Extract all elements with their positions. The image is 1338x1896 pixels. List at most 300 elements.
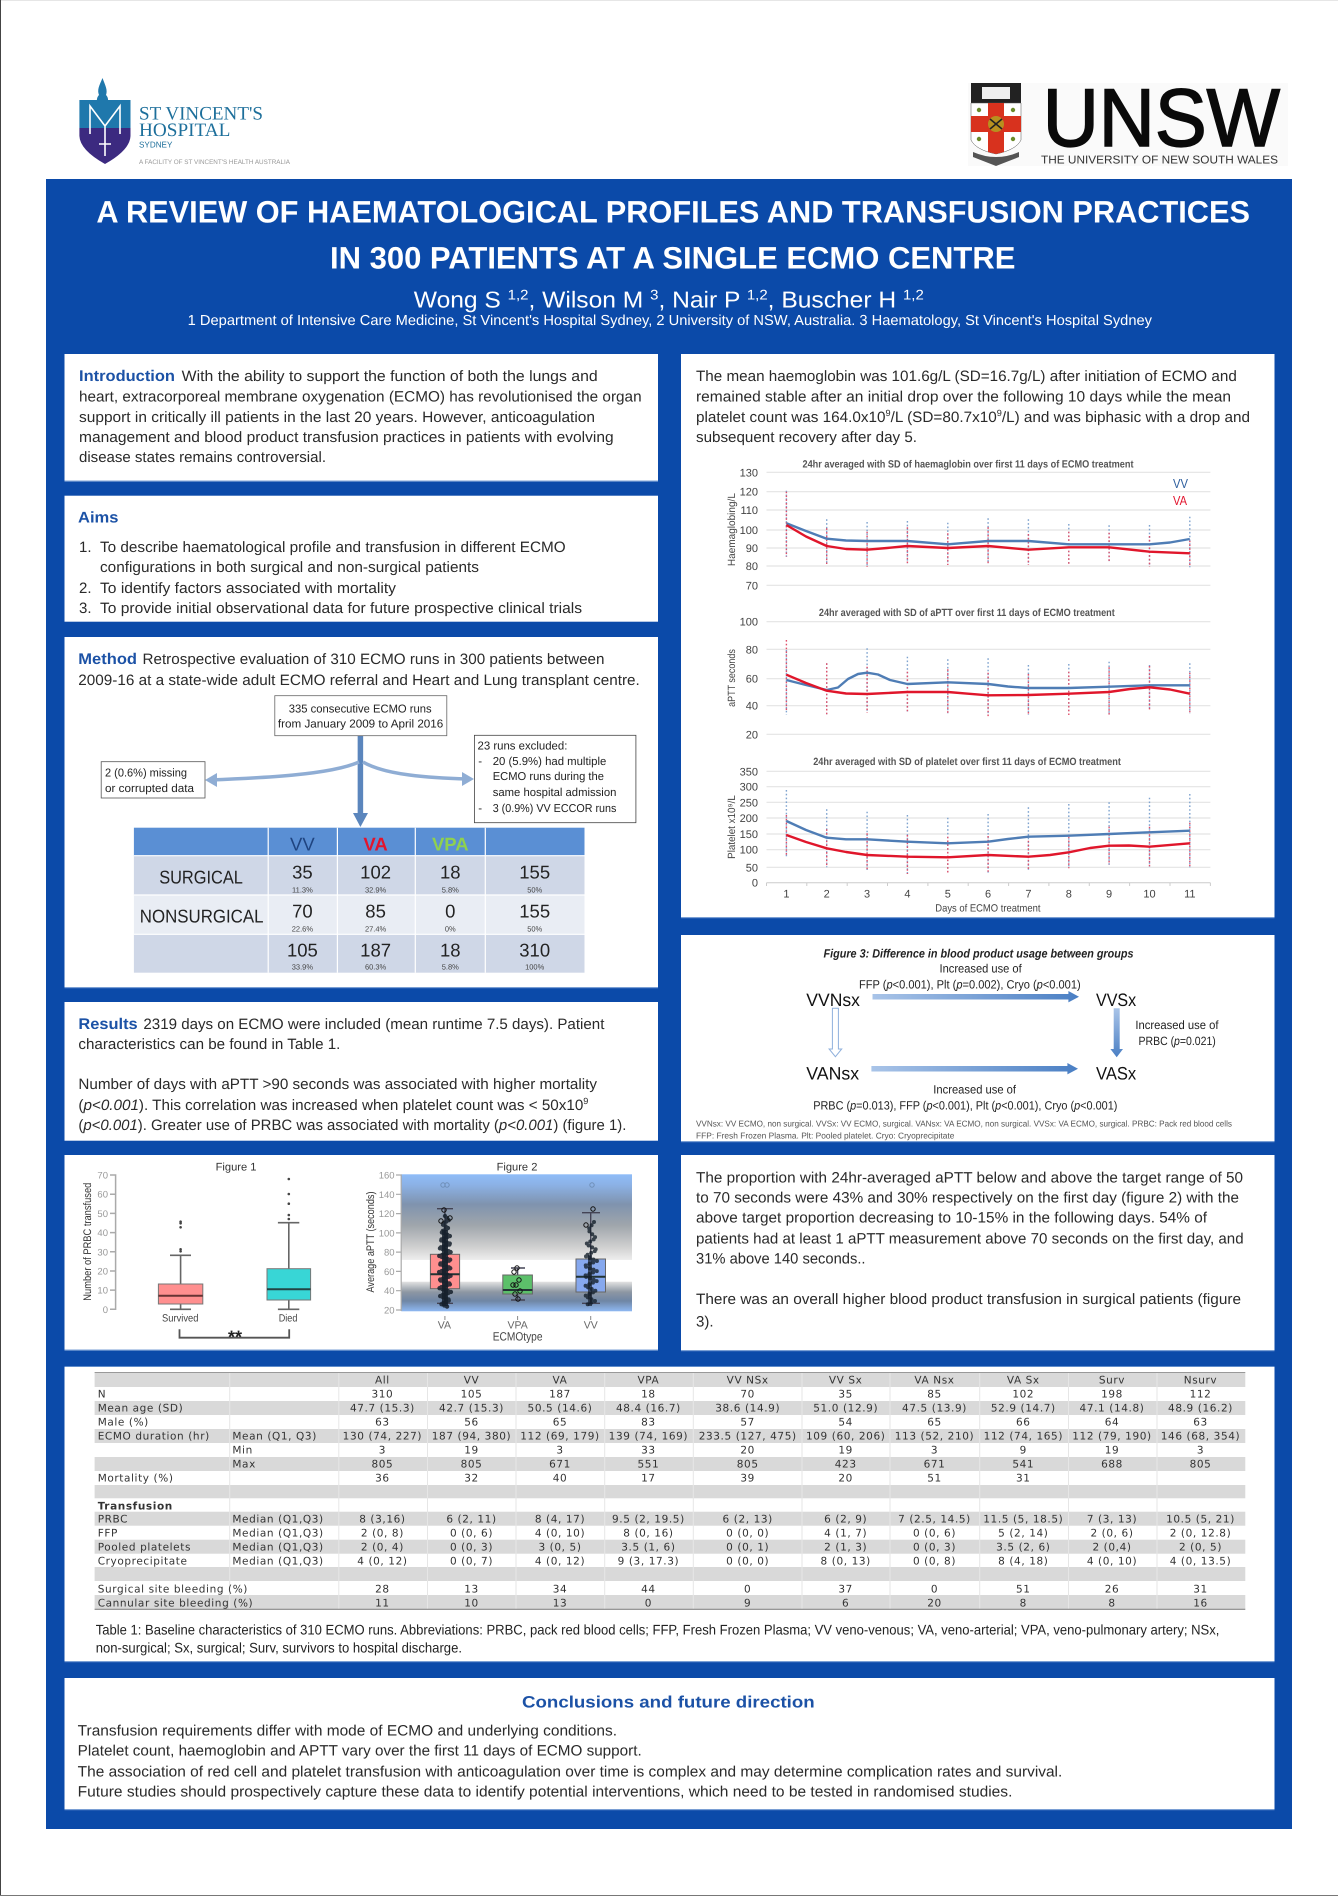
row: male: 65: [927, 1416, 942, 1428]
row: ECMO duration mean: 109 (60, 206): [806, 1430, 885, 1442]
table caption: non-surgical; Sx, surgical; Surv, survivors to hospital discharge.: [96, 1639, 462, 1655]
row: PRBC: [98, 1513, 1235, 1525]
ECMO runs summary table: 0%: [445, 924, 456, 933]
row: cannular site bleeding: 11: [375, 1597, 390, 1609]
row: cryoprecipitate: Cryoprecipitate: [98, 1555, 188, 1567]
row: PRBC: 7 (2.5, 14.5): [898, 1513, 971, 1525]
panel: introduction: support in critically ill patients in the last 20 years. However, anticoagulation: [79, 409, 595, 426]
panel: conclusions: Platelet count, haemoglobin and APTT vary over the first 11 days of ECMO support.: [78, 1743, 642, 1760]
row: mortality: Mortality (%): [98, 1472, 174, 1484]
logo: UNSW: THE UNIVERSITY OF NEW SOUTH WALES: [1041, 154, 1278, 166]
row: surgical site bleeding: 44: [641, 1583, 656, 1595]
flow box: missing data: 2 (0.6%) missing: [105, 768, 187, 780]
row: cannular site bleeding: 13: [553, 1597, 567, 1609]
row: ECMO duration mean: 112 (74, 165): [984, 1430, 1063, 1442]
panel: aPTT target text: There was an overall higher blood product transfusion in surgical patients (figure: [696, 1291, 1241, 1308]
line chart: platelet: 24hr averaged with SD of platelet over first 11 days of ECMO treatment: [813, 756, 1121, 768]
authors: , Nair P: [658, 286, 747, 312]
ECMO runs summary table: 102: [360, 861, 391, 882]
chart: figure 2 aPTT box plot: 20: [384, 1306, 395, 1316]
line chart: aPTT: 20: [746, 729, 758, 741]
row: ECMO duration max: 551: [637, 1458, 659, 1470]
ECMO runs summary table: 0: [445, 901, 455, 922]
arrow: VVNsx to VANsx (hollow): [829, 1008, 842, 1057]
row: FFP: 2 (0, 12.8): [1170, 1527, 1231, 1539]
panel: aims: 2.: [79, 580, 92, 597]
line chart: platelet: 350: [740, 766, 758, 778]
row: cannular site bleeding: 10: [464, 1597, 479, 1609]
row: surgical site bleeding: 13: [464, 1583, 479, 1595]
panel: aims: 3.: [79, 600, 92, 617]
chart: figure 2 aPTT box plot: VV: [584, 1319, 598, 1331]
panel: haemoglobin and platelet text with line charts: subsequent recovery after day 5.: [696, 429, 917, 446]
panel: introduction: [64, 354, 658, 482]
row: PRBC: 6 (2, 9): [824, 1513, 867, 1525]
row: surgical site bleeding: 34: [553, 1583, 567, 1595]
logo: St Vincent's Hospital: ST VINCENT'S: [139, 103, 263, 124]
panel: aPTT target text: The proportion with 24hr-averaged aPTT below and above the target range of 50: [696, 1169, 1243, 1186]
chart: figure 1 PRBC box plot: 50: [97, 1209, 108, 1220]
panel: figure 3 blood product usage: PRBC (p=0.021): [1138, 1034, 1216, 1048]
panel: introduction: Introduction: [79, 368, 175, 385]
chart: figure 2 aPTT box plot: [365, 1162, 632, 1344]
panel: results: 2319 days on ECMO were included (mean runtime 7.5 days). Patient: [143, 1016, 605, 1033]
panel: aims: To provide initial observational data for future prospective clinical trials: [100, 600, 582, 617]
row: mortality: 36: [375, 1472, 390, 1484]
panel: haemoglobin and platelet text with line charts: [681, 354, 1274, 918]
title: [96, 195, 1250, 276]
row: ECMO duration mean: 139 (74, 169): [609, 1430, 688, 1442]
arrow: VVNsx to VVSx: [872, 991, 1079, 1002]
flow box: excluded runs: 23 runs excluded:: [478, 740, 567, 752]
row: ECMO duration min: 3: [931, 1444, 938, 1456]
panel: haemoglobin and platelet text with line charts: The mean haemoglobin was 101.6g/L (SD=16.7g/L) after initiation of ECMO and: [696, 368, 1237, 385]
row: surgical site bleeding: Surgical site bleeding (%): [98, 1583, 248, 1595]
row: pooled platelets: 0 (0, 3): [450, 1541, 493, 1553]
row: male: 83: [641, 1416, 656, 1428]
panel: haemoglobin and platelet text with line charts: /L (SD=80.7x10: [891, 409, 997, 426]
row: pooled platelets: 2 (0,4): [1092, 1541, 1132, 1553]
row: PRBC: 9.5 (2, 19.5): [612, 1513, 685, 1525]
panel: method: Retrospective evaluation of 310 ECMO runs in 300 patients between: [142, 651, 604, 668]
line chart: aPTT: 80: [746, 644, 758, 656]
chart: figure 1 PRBC box plot: 30: [97, 1247, 108, 1258]
line chart: haemoglobin: 100: [740, 525, 758, 537]
row: male: 63: [375, 1416, 390, 1428]
line chart: platelet: 7: [1025, 889, 1031, 901]
panel: figure 3 blood product usage: Increased use of: [940, 961, 1022, 975]
row: N: 70: [740, 1388, 755, 1400]
panel: method: [64, 637, 658, 988]
row: PRBC: 11.5 (5, 18.5): [983, 1513, 1063, 1525]
row: ECMO duration min: 9: [1020, 1444, 1027, 1456]
row: cryoprecipitate: 0 (0, 0): [726, 1555, 769, 1567]
line chart: platelet: 300: [740, 782, 758, 794]
panel: aims: To describe haematological profile and transfusion in different ECMO: [100, 539, 566, 556]
authors: 1,2: [747, 286, 768, 302]
ECMO runs summary table: SURGICAL: [159, 866, 243, 887]
row: male: 64: [1105, 1416, 1119, 1428]
row: mortality: 32: [464, 1472, 479, 1484]
row: FFP: FFP: [98, 1527, 118, 1539]
row: ECMO duration min: 19: [1105, 1444, 1119, 1456]
ECMO runs summary table: 100%: [525, 962, 545, 971]
row: mean age: 47.1 (14.8): [1080, 1402, 1144, 1414]
chart: figure 2 aPTT box plot: 40: [384, 1286, 395, 1297]
logo: UNSW: UNSW: [1043, 73, 1281, 164]
row: cannular site bleeding: 6: [842, 1597, 849, 1609]
panel: conclusions: Future studies should prospectively capture these data to identify potential interventions, which need to be tested in randomised studies.: [78, 1784, 1012, 1801]
table header row: VA Nsx: [914, 1374, 955, 1386]
row: N: 35: [838, 1388, 853, 1400]
flow box: excluded runs: 3 (0.9%) VV ECCOR runs: [493, 803, 617, 815]
row: ECMO duration min: 20: [740, 1444, 755, 1456]
flow box: excluded runs: ECMO runs during the: [493, 771, 604, 783]
flow arrows: [205, 736, 474, 827]
row: pooled platelets: 3 (0, 5): [538, 1541, 582, 1553]
chart: figure 2 aPTT box plot: VA: [438, 1319, 451, 1331]
line chart: haemoglobin: VV: [1173, 476, 1188, 491]
row: ECMO duration max: 805: [1190, 1458, 1211, 1470]
row: FFP: 0 (0, 6): [913, 1527, 956, 1539]
ECMO runs summary table: 5.8%: [442, 962, 459, 971]
title: IN 300 PATIENTS AT A SINGLE ECMO CENTRE: [330, 241, 1015, 276]
chart: figure 2 aPTT box plot: 120: [379, 1209, 395, 1220]
row: N: 112: [1190, 1388, 1211, 1400]
line chart: haemoglobin: 80: [746, 561, 758, 573]
line chart: haemoglobin: 24hr averaged with SD of haemaglobin over first 11 days of ECMO treatment: [802, 458, 1134, 470]
ECMO runs summary table: 18: [440, 861, 461, 882]
row: cryoprecipitate: 4 (0, 13.5): [1170, 1555, 1231, 1567]
row: male: 56: [464, 1416, 479, 1428]
panel: conclusions: Conclusions and future direction: [522, 1693, 815, 1711]
table header row: VV: [464, 1374, 479, 1386]
flow box: 335 consecutive runs: 335 consecutive ECMO runs: [289, 703, 432, 715]
flow box: 335 consecutive runs: [275, 696, 447, 736]
row: male: 54: [838, 1416, 853, 1428]
row: PRBC: 6 (2, 13): [723, 1513, 773, 1525]
line chart: platelet: 0: [752, 878, 758, 890]
row: ECMO duration mean: 187 (94, 380): [432, 1430, 511, 1442]
line chart: platelet: 6: [985, 889, 991, 901]
arrow: VVSx to VASx: [1110, 1008, 1123, 1057]
row: FFP: 2 (0, 6): [1090, 1527, 1134, 1539]
row: ECMO duration min: 19: [464, 1444, 479, 1456]
chart: figure 2 aPTT box plot: 140: [379, 1190, 395, 1201]
panel: figure 3 blood product usage: FFP: Fresh Frozen Plasma. Plt: Pooled platelet. Cryo: Cryoprecipitate: [696, 1130, 955, 1140]
authors: 1,2: [508, 286, 529, 302]
row: PRBC: PRBC: [98, 1513, 128, 1525]
table caption: Table 1: Baseline characteristics of 310 ECMO runs. Abbreviations: PRBC, pack red blood cells; FFP, Fresh Frozen Plasma; VV veno-venous; VA, veno-arterial; VPA, veno-pulmonary artery; NSx,: [96, 1621, 1219, 1637]
flow box: missing data: [101, 762, 205, 798]
panel: figure 3 blood product usage: [681, 935, 1274, 1142]
row: cryoprecipitate: 0 (0, 8): [913, 1555, 956, 1567]
panel: figure 3 blood product usage: VASx: [1096, 1063, 1136, 1083]
row: ECMO duration mean: [98, 1430, 1240, 1442]
panel: results: 9: [583, 1096, 588, 1106]
row: ECMO duration max: 805: [461, 1458, 482, 1470]
row: surgical site bleeding: 26: [1105, 1583, 1119, 1595]
arrow: VANsx to VASx: [871, 1063, 1078, 1074]
row: ECMO duration max: Max: [232, 1458, 256, 1470]
ECMO runs summary table: 310: [519, 940, 550, 961]
row: cannular site bleeding: 8: [1108, 1597, 1116, 1609]
ECMO runs summary table: 11.3%: [292, 885, 313, 894]
chart: figure 2 aPTT box plot: 60: [384, 1267, 395, 1278]
row: ECMO duration max: 541: [1012, 1458, 1034, 1470]
panel: figure 3 blood product usage: Figure 3: Difference in blood product usage between groups: [824, 946, 1134, 960]
panel: haemoglobin and platelet text with line charts: 9: [997, 408, 1002, 418]
row: cryoprecipitate: 4 (0, 12): [357, 1555, 408, 1567]
row: cryoprecipitate: 4 (0, 12): [535, 1555, 585, 1567]
line chart: platelet: 100: [740, 845, 758, 857]
chart: figure 1 PRBC box plot: **: [228, 1327, 242, 1347]
ECMO runs summary table: NONSURGICAL: [140, 905, 264, 926]
logo: St Vincent's Hospital: SYDNEY: [139, 139, 173, 149]
chart: figure 2 aPTT box plot: VPA: [507, 1319, 528, 1331]
panel: results: Results: [78, 1016, 138, 1033]
line chart: aPTT: 60: [746, 674, 758, 686]
ECMO runs summary table: 22.6%: [292, 924, 313, 933]
line chart: platelet: 150: [740, 829, 758, 841]
chart: figure 2 aPTT box plot: 80: [384, 1248, 395, 1259]
panel: introduction: With the ability to support the function of both the lungs and: [182, 368, 598, 385]
flow box: excluded runs: 20 (5.9%) had multiple: [493, 756, 606, 768]
panel: conclusions: Transfusion requirements differ with mode of ECMO and underlying conditions.: [78, 1723, 617, 1740]
panel: results: Number of days with aPTT >90 seconds was associated with higher mortality: [78, 1076, 597, 1093]
row: N: 187: [549, 1388, 571, 1400]
row: cannular site bleeding: 20: [927, 1597, 942, 1609]
panel: introduction: management and blood product transfusion practices in patients with evolving: [79, 429, 614, 446]
row: cryoprecipitate: 9 (3, 17.3): [618, 1555, 679, 1567]
row: mean age: 48.4 (16.7): [616, 1402, 681, 1414]
row: mortality: 31: [1016, 1472, 1031, 1484]
chart: figure 2 aPTT box plot: Average aPTT (seconds): [365, 1192, 377, 1292]
row: ECMO duration min: 19: [838, 1444, 853, 1456]
ECMO runs summary table: 60.3%: [365, 962, 387, 971]
line chart: haemoglobin: 120: [740, 487, 758, 499]
row: male: 63: [1193, 1416, 1208, 1428]
table header row: All: [375, 1374, 390, 1386]
chart: figure 1 PRBC box plot: Survived: [162, 1313, 199, 1325]
row: pooled platelets: 2 (0, 4): [361, 1541, 404, 1553]
ECMO runs summary table: 70: [292, 901, 313, 922]
row: N: 310: [371, 1388, 393, 1400]
row: pooled platelets: Pooled platelets: [98, 1541, 191, 1553]
ECMO runs summary table: 50%: [527, 924, 543, 933]
row: cannular site bleeding: 16: [1193, 1597, 1208, 1609]
panel: conclusions: [64, 1678, 1274, 1810]
row: mean age: [98, 1402, 1233, 1414]
row: PRBC: 8 (3,16): [359, 1513, 406, 1525]
row: surgical site bleeding: 31: [1193, 1583, 1208, 1595]
row: ECMO duration mean: 146 (68, 354): [1161, 1430, 1240, 1442]
row: ECMO duration min: 33: [641, 1444, 656, 1456]
row: ECMO duration mean: ECMO duration (hr): [98, 1430, 210, 1442]
panel: results: (p<0.001). This correlation was increased when platelet count was < 50x10: [78, 1097, 577, 1114]
logo: St Vincent's Hospital: HOSPITAL: [139, 120, 230, 141]
panel: aPTT target text: patients had at least 1 aPTT measurement above 70 seconds on the first day, and: [696, 1230, 1244, 1247]
row: FFP: 8 (0, 16): [623, 1527, 674, 1539]
authors: 1,2: [903, 286, 924, 302]
panel: figure 3 blood product usage: PRBC (p=0.013), FFP (p<0.001), Plt (p<0.001), Cryo (p<0.001): [813, 1098, 1117, 1112]
table caption: [96, 1621, 1219, 1655]
panel: figure 3 blood product usage: VANsx: [806, 1063, 859, 1083]
affiliations: 1 Department of Intensive Care Medicine, St Vincent's Hospital Sydney, 2 University of NSW, Australia. 3 Haematology, St Vincent's Hospital Sydney: [188, 313, 1153, 329]
ECMO runs summary table: VA: [363, 834, 388, 855]
ECMO runs summary table: 155: [519, 861, 550, 882]
chart: figure 2 aPTT box plot: 160: [379, 1170, 395, 1182]
line chart: platelet: Platelet x10⁹/L: [726, 795, 738, 859]
panel: method: Method: [78, 651, 137, 668]
line chart: aPTT: aPTT seconds: [726, 649, 738, 707]
panel: aPTT target text: to 70 seconds were 43% and 30% respectively on the first day (figure 2) with the: [696, 1190, 1239, 1207]
row: mean age: 50.5 (14.6): [528, 1402, 592, 1414]
ECMO runs summary table: 35: [292, 861, 313, 882]
logo: St Vincent's Hospital: [79, 78, 291, 166]
table header row: VV Sx: [829, 1374, 862, 1386]
panel: figure 3 blood product usage: FFP (p<0.001), Plt (p=0.002), Cryo (p<0.001): [859, 977, 1081, 991]
row: transfusion heading: Transfusion: [98, 1500, 173, 1512]
table header row: VPA: [637, 1374, 660, 1386]
row: male: [98, 1416, 1208, 1428]
line chart: haemoglobin: 110: [740, 505, 758, 517]
flow box: missing data: or corrupted data: [105, 783, 195, 795]
line chart: haemoglobin: Haemaglobing/L: [726, 493, 738, 566]
row: ECMO duration mean: 130 (74, 227): [343, 1430, 422, 1442]
row: cryoprecipitate: 4 (0, 10): [1087, 1555, 1137, 1567]
ECMO runs summary table: 27.4%: [365, 924, 387, 933]
row: mean age: 51.0 (12.9): [813, 1402, 878, 1414]
row: surgical site bleeding: [98, 1583, 1208, 1595]
row: cannular site bleeding: 0: [645, 1597, 652, 1609]
line chart: haemoglobin: [726, 458, 1210, 592]
row: N: 102: [1012, 1388, 1034, 1400]
blue poster background: [46, 179, 1292, 829]
line chart: platelet: Days of ECMO treatment: [935, 903, 1041, 915]
table header row: Surv: [1099, 1374, 1125, 1386]
row: ECMO duration min: [232, 1444, 1204, 1456]
row: ECMO duration max: [232, 1458, 1211, 1470]
row: FFP: 0 (0, 6): [450, 1527, 493, 1539]
row: mortality: 40: [553, 1472, 567, 1484]
row: male: 66: [1016, 1416, 1031, 1428]
chart: figure 1 PRBC box plot: 60: [97, 1190, 108, 1201]
row: N: 85: [927, 1388, 942, 1400]
logo: St Vincent's Hospital: A FACILITY OF ST VINCENT'S HEALTH AUSTRALIA: [139, 159, 291, 166]
row: pooled platelets: 3.5 (1, 6): [621, 1541, 676, 1553]
panel: aims: configurations in both surgical and non-surgical patients: [100, 559, 479, 576]
row: FFP: 4 (1, 7): [824, 1527, 867, 1539]
chart: figure 2 aPTT box plot: Figure 2: [497, 1162, 537, 1174]
row: PRBC: 6 (2, 11): [446, 1513, 497, 1525]
row: mean age: 38.6 (14.9): [715, 1402, 780, 1414]
chart: figure 1 PRBC box plot: 10: [97, 1286, 108, 1297]
line chart: aPTT: 40: [746, 701, 758, 713]
line chart: platelet: 5: [945, 889, 951, 901]
table header row: VV NSx: [727, 1374, 769, 1386]
row: male: 57: [740, 1416, 755, 1428]
chart: figure 1 PRBC box plot: 70: [97, 1170, 108, 1182]
authors: 3: [650, 286, 659, 302]
row: cannular site bleeding: Cannular site bleeding (%): [98, 1597, 253, 1609]
table header row: Nsurv: [1184, 1374, 1217, 1386]
row: ECMO duration mean: 113 (52, 210): [895, 1430, 974, 1442]
chart: figure 1 PRBC box plot: [82, 1162, 311, 1347]
row: ECMO duration max: 688: [1101, 1458, 1123, 1470]
line chart: platelet: 200: [740, 813, 758, 825]
line chart: platelet: [726, 756, 1210, 915]
row: N: 105: [461, 1388, 482, 1400]
panel: introduction: disease states remains controversial.: [79, 449, 326, 466]
row: ECMO duration mean: Mean (Q1, Q3): [232, 1430, 317, 1442]
flow box: excluded runs: same hospital admission: [493, 787, 616, 799]
panel: haemoglobin and platelet text with line charts: /L) and was biphasic with a drop and: [1002, 409, 1250, 426]
row: cryoprecipitate: 8 (4, 18): [998, 1555, 1048, 1567]
ECMO runs summary table: [134, 828, 584, 973]
chart: figure 1 PRBC box plot: 20: [97, 1266, 108, 1278]
chart: figure 2 aPTT box plot: 100: [379, 1228, 395, 1239]
authors: , Wilson M: [529, 286, 650, 312]
ECMO runs summary table: 85: [365, 901, 386, 922]
line chart: platelet: 9: [1106, 889, 1112, 901]
row: surgical site bleeding: 28: [375, 1583, 390, 1595]
row: FFP: 5 (2, 14): [998, 1527, 1048, 1539]
panel: introduction: heart, extracorporeal membrane oxygenation (ECMO) has revolutionised the organ: [79, 389, 642, 406]
row: ECMO duration max: 671: [549, 1458, 571, 1470]
table header row: VA Sx: [1007, 1374, 1040, 1386]
ECMO runs summary table: 32.9%: [365, 885, 387, 894]
ECMO runs summary table: VPA: [432, 834, 469, 855]
line chart: haemoglobin: VA: [1173, 493, 1187, 508]
row: mortality: [98, 1472, 1031, 1484]
panel: haemoglobin and platelet text with line charts: remained stable after an initial drop over the following 10 days while the mean: [696, 389, 1231, 406]
line chart: haemoglobin: 130: [740, 467, 758, 479]
panel: aPTT target text: above target proportion decreasing to 10-15% in the following days. 54% of: [696, 1210, 1208, 1227]
row: N: 198: [1101, 1388, 1123, 1400]
row: mortality: 17: [641, 1472, 656, 1484]
line chart: platelet: 11: [1184, 889, 1196, 901]
chart: figure 2 aPTT box plot: ECMOtype: [493, 1330, 543, 1344]
row: FFP: 4 (0, 10): [535, 1527, 585, 1539]
table header row: [375, 1374, 1217, 1386]
panel: figure 3 blood product usage: VVNsx: [806, 990, 860, 1010]
row: ECMO duration max: 423: [835, 1458, 857, 1470]
row: cryoprecipitate: 8 (0, 13): [821, 1555, 871, 1567]
line chart: platelet: 50: [746, 862, 758, 874]
row: surgical site bleeding: 37: [838, 1583, 853, 1595]
panel: aims: [64, 496, 658, 622]
line chart: platelet: 1: [783, 889, 789, 901]
flow box: 335 consecutive runs: from January 2009 to April 2016: [278, 718, 443, 730]
ECMO runs summary table: 50%: [527, 885, 543, 894]
title: A REVIEW OF HAEMATOLOGICAL PROFILES AND TRANSFUSION PRACTICES: [96, 195, 1250, 230]
flow box: excluded runs: [474, 735, 636, 823]
row: ECMO duration mean: 112 (79, 190): [1072, 1430, 1152, 1442]
panel: results: [64, 1002, 658, 1141]
row: pooled platelets: 2 (0, 5): [1179, 1541, 1222, 1553]
panel: method: 2009-16 at a state-wide adult ECMO referral and Heart and Lung transplant centre.: [78, 672, 640, 689]
row: mortality: 20: [838, 1472, 853, 1484]
ECMO runs summary table: 187: [360, 940, 391, 961]
row: ECMO duration max: 671: [924, 1458, 945, 1470]
panel: baseline characteristics table: [64, 1366, 1274, 1662]
row: PRBC: 8 (4, 17): [535, 1513, 585, 1525]
row: ECMO duration max: 805: [737, 1458, 759, 1470]
row: N: [98, 1388, 1211, 1400]
row: ECMO duration min: 3: [379, 1444, 386, 1456]
row: cannular site bleeding: [98, 1597, 1208, 1609]
